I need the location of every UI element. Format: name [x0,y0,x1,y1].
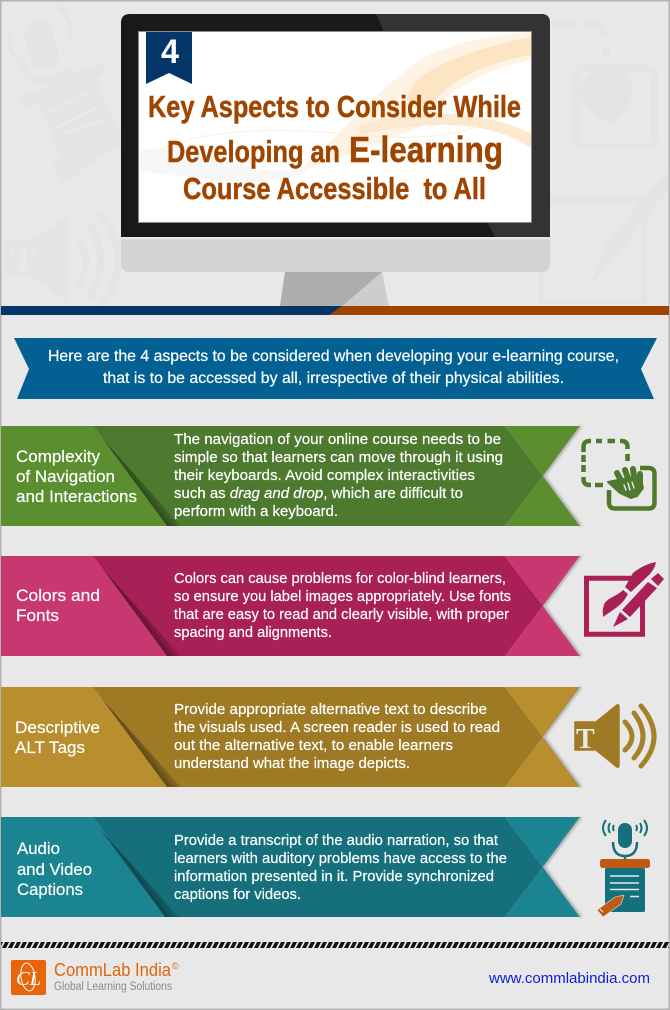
heading [17,839,92,899]
heading: and Interactions [16,487,137,506]
title: Developing an [167,134,340,169]
company name: CommLab India [54,960,172,980]
description: simple so that learners can move through it using [174,449,503,466]
tagline: Global Learning Solutions [54,981,172,993]
description [174,832,507,903]
heading [16,586,100,625]
description: The navigation of your online course needs to be [174,431,501,448]
title: E-learning [349,129,503,170]
description: out the alternative text, to enable learners [174,737,453,754]
title: Course Accessible to All [183,171,486,206]
description: such as drag and drop, which are difficult to [174,485,463,502]
heading: Colors and [16,586,100,605]
description: their keyboards. Avoid complex interactivities [174,467,475,484]
heading [16,447,137,506]
heading: and Video [17,860,92,879]
ribbon: number 4: 4 [161,33,179,71]
description: that are easy to read and clearly visible, with proper [174,606,509,623]
copyright mark: © [172,961,179,971]
description: learners with auditory problems have access to the [174,850,507,867]
description: Colors can cause problems for color-blind learners, [174,570,506,587]
intro banner: that is to be accessed by all, irrespective of their physical abilities. [103,370,564,387]
description: information presented in it. Provide synchronized [174,868,494,885]
description: the visuals used. A screen reader is used to read [174,719,500,736]
title [148,89,521,206]
logo mark [11,960,46,995]
ribbon band [1,426,581,526]
icon: microphone and transcript [597,820,650,917]
hatched divider [1,942,669,948]
heading: Complexity [16,447,100,466]
description [174,431,503,520]
ribbon: number 4 [146,32,192,84]
heading: of Navigation [16,467,115,486]
panel: colors and fonts [1,556,664,656]
icon: speaker with T [575,705,654,767]
description [174,570,511,641]
heading: Captions [17,880,83,899]
ribbon band [1,556,581,656]
description: understand what the image depicts. [174,755,410,772]
icon: pencil and brush [586,562,664,634]
description: spacing and alignments. [174,624,332,641]
ribbon band [1,817,581,917]
panel: descriptive alt tags [1,687,654,787]
description [174,701,500,772]
description: Provide a transcript of the audio narration, so that [174,832,499,849]
monitor bezel [121,14,550,237]
monitor chin [121,237,550,272]
heading [15,718,100,757]
description: so ensure you label images appropriately. Use fonts [174,588,511,605]
heading: Fonts [16,606,59,625]
footer logo [11,960,179,995]
panel: complexity of navigation [1,426,654,526]
screen [138,32,532,222]
footer url: www.commlabindia.com [488,970,650,987]
intro banner [14,338,657,399]
bezel reflection [376,14,550,237]
intro banner: Here are the 4 aspects to be considered when developing your e-learning course, [48,348,619,365]
description: captions for videos. [174,886,301,903]
ghost icon: microphone and document [10,6,124,183]
monitor [121,14,550,306]
ghost icon: speaker: T [10,239,35,281]
ghost icon: pencil and brush [541,172,668,301]
heading: Audio [17,839,60,858]
heading: Descriptive [15,718,100,737]
ghost icon: speaker [4,215,118,306]
description: perform with a keyboard. [174,503,338,520]
ghost icon: drag hand [553,24,654,147]
panel: audio and video captions [1,817,650,917]
header divider bar [1,306,669,315]
monitor stand [280,272,389,306]
icon: speaker with T: T [576,724,595,755]
logo mark: CL [16,968,41,990]
title: Key Aspects to Consider While [148,89,521,124]
icon: drag and drop hand [584,441,654,508]
heading: ALT Tags [15,738,85,757]
screen swoosh decoration [139,32,531,182]
ribbon band [1,687,581,787]
background ghost icons [4,6,668,306]
description: Provide appropriate alternative text to describe [174,701,487,718]
